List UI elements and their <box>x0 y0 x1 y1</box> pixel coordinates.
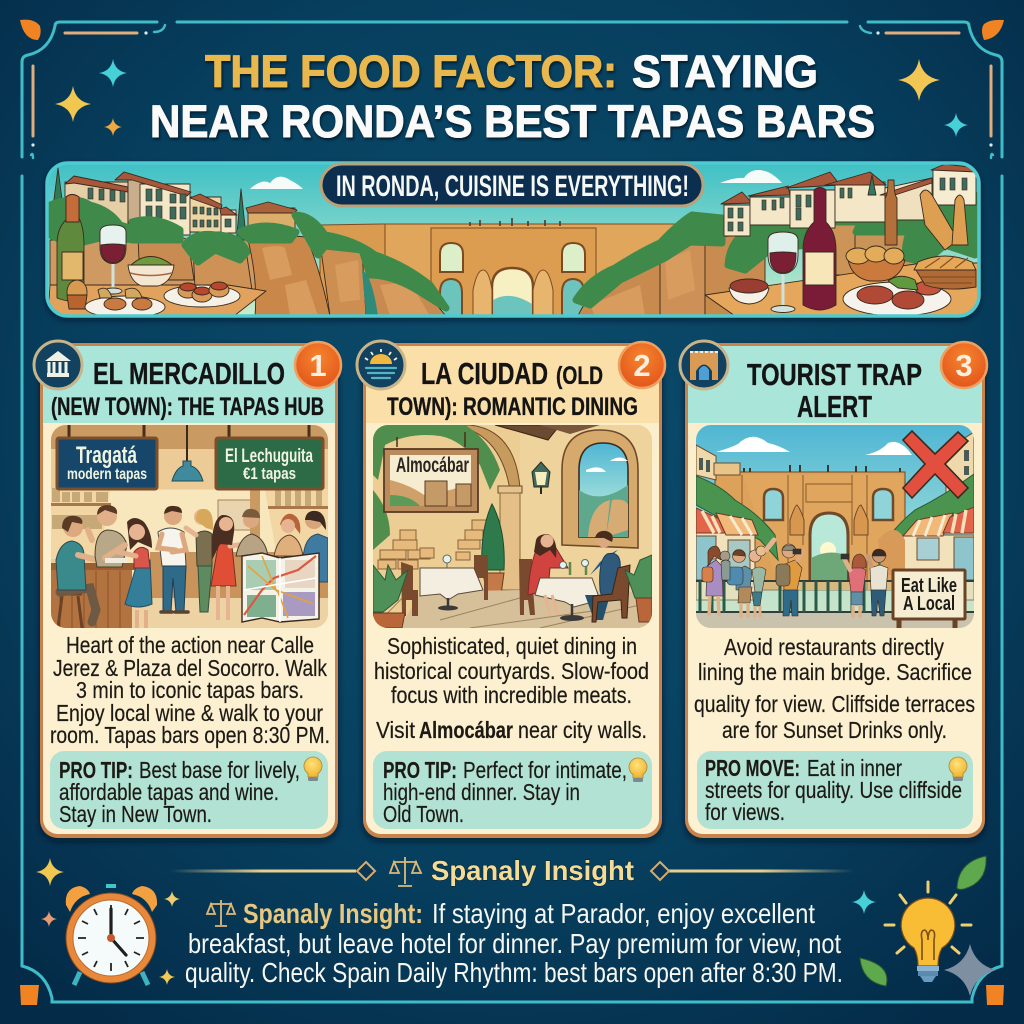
insight text: If staying at Parador, enjoy excellent <box>432 898 815 929</box>
pro tip: Perfect for intimate, <box>463 757 627 783</box>
left greenery <box>50 200 446 308</box>
icon: pendant lamp <box>172 425 203 481</box>
badge: number 1: 1 <box>309 348 327 383</box>
panel: Tourist Trap Alert <box>680 341 987 838</box>
bridge <box>715 472 905 590</box>
body text: near city walls. <box>518 717 647 743</box>
body text: Almocábar <box>419 717 513 743</box>
body text: 3 min to iconic tapas bars. <box>76 677 304 703</box>
pro move: for views. <box>705 799 785 825</box>
title: NEAR RONDA’S BEST TAPAS BARS <box>150 96 875 147</box>
banner slogan pill: IN RONDA, CUISINE IS EVERYTHING! <box>336 170 689 203</box>
right town <box>721 164 977 236</box>
body text: focus with incredible meats. <box>391 682 632 708</box>
illustration: tapas bar <box>51 425 328 628</box>
potted plants <box>373 565 408 612</box>
tourists <box>702 540 888 618</box>
body text: Heart of the action near Calle <box>66 632 314 658</box>
insight text: quality. Check Spain Daily Rhythm: best bars open after 8:30 PM. <box>185 957 843 988</box>
insight text: breakfast, but leave hotel for dinner. Pay premium for view, not <box>188 928 841 959</box>
left table and food <box>48 194 266 318</box>
railing <box>696 582 974 600</box>
badge: number 2 <box>619 342 665 388</box>
map <box>242 553 319 622</box>
pro tip: PRO TIP: <box>59 757 133 783</box>
icon: scales <box>207 900 235 926</box>
heading: Spanaly Insight <box>170 855 854 886</box>
sign: Tragatá <box>57 425 157 489</box>
vines <box>373 425 500 490</box>
body text: Avoid restaurants directly <box>724 634 944 660</box>
bridge walls <box>320 224 385 300</box>
heading <box>747 357 922 424</box>
heading: ALERT <box>797 389 872 424</box>
body text: lining the main bridge. Sacrifice <box>698 659 972 685</box>
right shops <box>903 535 974 600</box>
heading <box>387 356 638 421</box>
right table and couple <box>519 531 630 622</box>
sparkles: bottom <box>36 858 996 996</box>
badge: number 1 <box>295 342 341 388</box>
body text: room. Tapas bars open 8:30 PM. <box>50 722 330 748</box>
pro move: PRO MOVE: <box>705 755 800 781</box>
left shops <box>696 533 755 600</box>
badge: number 3: 3 <box>955 348 973 383</box>
body text: Jerez & Plaza del Socorro. Walk <box>53 655 327 681</box>
icon: town hall <box>34 341 82 389</box>
body text <box>374 633 649 743</box>
sign: El Lechuguita: €1 tapas <box>243 464 296 483</box>
heading: LA CIUDAD <box>421 356 548 391</box>
window <box>562 430 638 548</box>
sign: Eat Like A Local: Eat Like <box>901 575 957 597</box>
bricks <box>378 520 486 569</box>
illustration: bridge and tourists <box>696 425 974 628</box>
icon: red X <box>903 431 968 498</box>
icon: alarm clock <box>66 884 157 985</box>
icon: tip bulb <box>304 757 322 781</box>
heading: (NEW TOWN): THE TAPAS HUB <box>51 393 324 421</box>
sign: Eat Like A Local: A Local <box>903 593 955 615</box>
left table <box>401 555 488 616</box>
sign: El Lechuguita <box>216 425 323 489</box>
pro tip <box>373 751 652 829</box>
pro tip: high-end dinner. Stay in <box>383 779 580 805</box>
sign: Eat Like A Local <box>893 570 965 628</box>
icon: scales <box>390 857 421 886</box>
left hill town <box>52 168 297 245</box>
body text <box>694 634 975 743</box>
icon: sunset over water <box>357 341 405 389</box>
heading: (OLD <box>556 362 603 390</box>
sign: Tragatá: modern tapas <box>67 466 147 483</box>
heading <box>51 356 324 421</box>
title <box>150 46 875 147</box>
sign: Almocábar <box>384 432 478 512</box>
green slopes <box>696 476 778 560</box>
lantern <box>532 462 550 487</box>
body text: Visit <box>376 717 415 743</box>
body text: are for Sunset Drinks only. <box>722 717 947 743</box>
insight text: Spanaly Insight: <box>243 898 423 929</box>
banner slogan pill <box>321 164 703 206</box>
panel: El Mercadillo <box>34 341 341 838</box>
heading: Spanaly Insight: Spanaly Insight <box>431 855 634 886</box>
body text <box>50 632 330 748</box>
sparkles: top <box>55 59 968 137</box>
title: STAYING <box>632 46 818 97</box>
badge: number 2: 2 <box>633 348 651 383</box>
sign: Tragatá: Tragatá <box>76 442 137 469</box>
pro move: Eat in inner <box>807 755 902 781</box>
right cliffs and greenery <box>578 226 915 314</box>
title: THE FOOD FACTOR: <box>205 46 617 97</box>
heading: TOURIST TRAP <box>747 357 922 392</box>
pro tip <box>50 751 328 829</box>
illustration: courtyard dining <box>373 425 652 628</box>
icon: leaves <box>860 856 986 986</box>
body text: Enjoy local wine & walk to your <box>56 700 323 726</box>
sign: Almocábar: Almocábar <box>396 454 469 477</box>
people <box>58 594 82 628</box>
left buildings <box>696 445 716 480</box>
right table and food <box>705 180 978 316</box>
right buildings <box>946 432 974 492</box>
pro tip: PRO TIP: <box>383 757 457 783</box>
cypress and pot <box>482 504 504 570</box>
icon: tip bulb <box>949 757 967 781</box>
heading: TOWN): ROMANTIC DINING <box>387 393 638 421</box>
body text: historical courtyards. Slow-food <box>374 658 649 684</box>
badge: number 3 <box>941 342 987 388</box>
icon: tip bulb <box>629 758 647 782</box>
icon: lightbulb <box>885 882 971 982</box>
pro tip: Best base for lively, <box>139 757 300 783</box>
pro tip: affordable tapas and wine. <box>59 779 279 805</box>
body text: Sophisticated, quiet dining in <box>387 633 637 659</box>
icon: bridge <box>680 341 728 389</box>
left cliffs <box>50 234 446 316</box>
panel: La Ciudad <box>357 341 665 838</box>
pro tip: Stay in New Town. <box>59 801 212 827</box>
pro move: streets for quality. Use cliffside <box>705 777 962 803</box>
floor <box>400 590 652 628</box>
insight text <box>185 898 843 988</box>
heading: EL MERCADILLO <box>93 356 285 391</box>
banner: Ronda panorama <box>46 162 980 318</box>
pro tip: Old Town. <box>383 801 464 827</box>
pro move <box>697 751 973 829</box>
clouds <box>250 170 782 189</box>
sign: El Lechuguita: El Lechuguita <box>225 446 313 467</box>
